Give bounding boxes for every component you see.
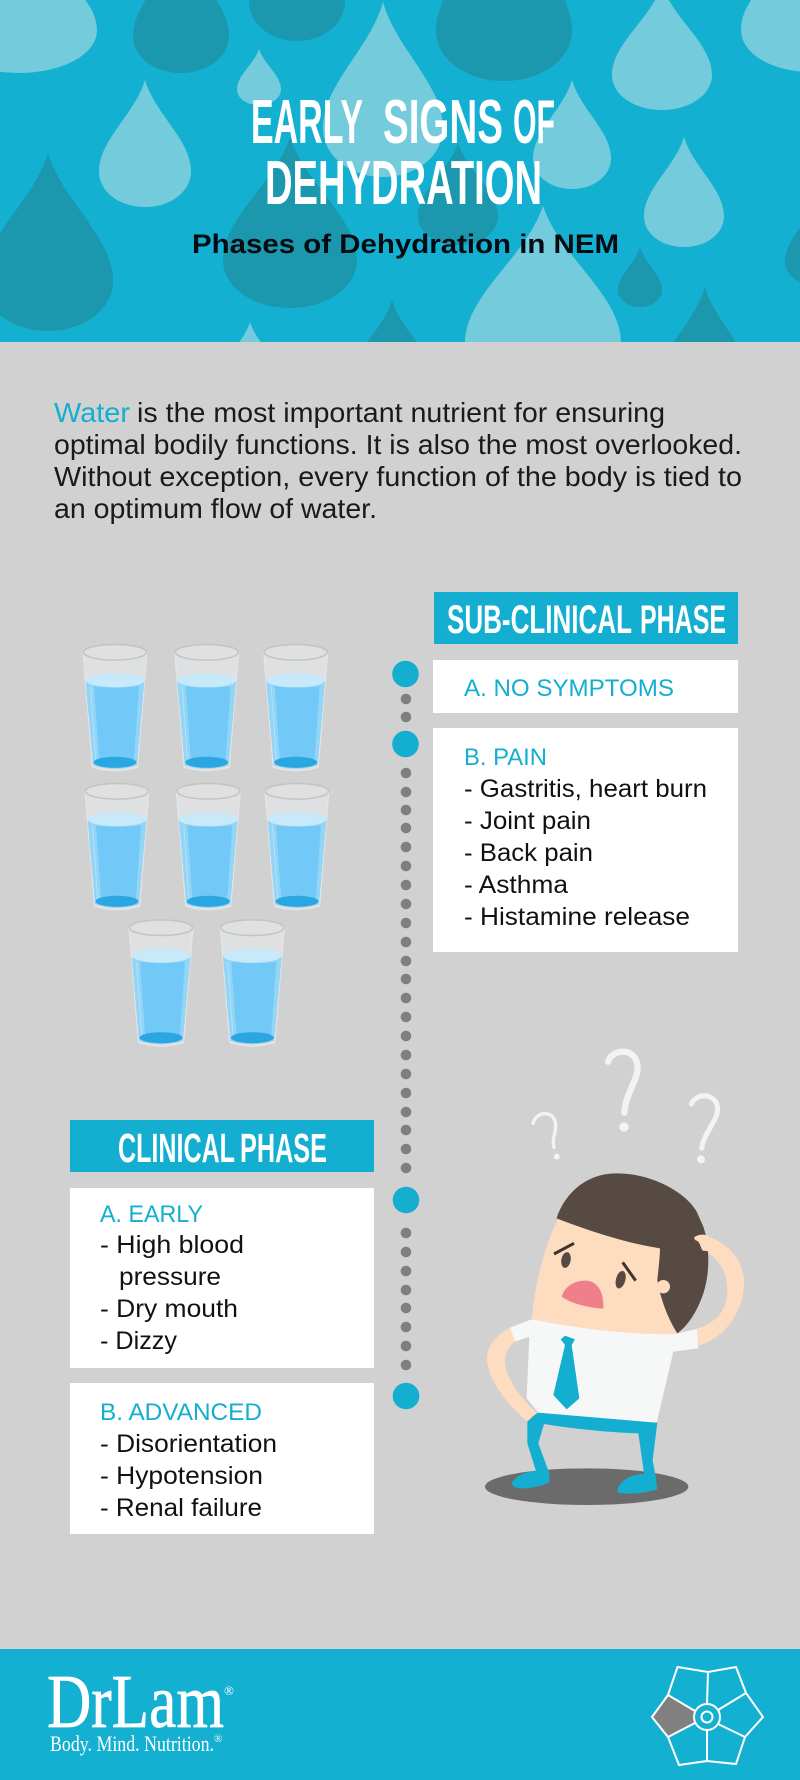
shirt	[510, 1319, 698, 1423]
heading: clinical phase: PHASE	[240, 1125, 327, 1171]
panel: no symptoms: A. NO SYMPTOMS	[464, 675, 674, 702]
panel: advanced	[70, 1383, 374, 1534]
heading: sub-clinical phase: PHASE	[640, 598, 726, 642]
heading: clinical phase: CLINICAL	[118, 1125, 235, 1171]
heading: sub-clinical phase: SUB-CLINICAL	[447, 598, 632, 642]
panel: early: A. EARLY	[100, 1201, 203, 1228]
intro text: is the most important nutrient for ensuring	[137, 397, 665, 428]
panel: pain: - Back pain	[464, 839, 593, 867]
intro text: Water	[54, 397, 130, 428]
timeline	[392, 661, 419, 1409]
illustration: eight glasses of water	[83, 644, 329, 1046]
panel: pain: - Joint pain	[464, 807, 591, 835]
tie	[553, 1336, 579, 1409]
panel: early	[70, 1188, 374, 1368]
shadow	[485, 1468, 688, 1505]
panel: pain: B. PAIN	[464, 744, 547, 771]
logo: Dr Lam: Body. Mind. Nutrition.	[50, 1731, 214, 1756]
panel: pain: - Histamine release	[464, 903, 690, 931]
icon: NEM emblem	[652, 1667, 763, 1765]
trousers and shoes	[512, 1413, 657, 1494]
intro text: Without exception, every function of the body is tied to	[54, 461, 742, 492]
hair	[557, 1173, 708, 1333]
panel: pain: - Asthma	[464, 871, 568, 899]
panel: advanced: B. ADVANCED	[100, 1399, 262, 1426]
title	[251, 88, 555, 218]
panel: advanced: - Hypotension	[100, 1462, 263, 1490]
panel: early: - Dry mouth	[100, 1295, 238, 1323]
panel: no symptoms	[433, 660, 738, 713]
panel: pain: - Gastritis, heart burn	[464, 775, 707, 803]
panel: advanced: - Disorientation	[100, 1430, 277, 1458]
head	[532, 1218, 677, 1334]
panel: early: - High blood	[100, 1231, 244, 1259]
panel: early: pressure	[119, 1263, 221, 1291]
logo: Dr Lam: DrLam	[47, 1660, 224, 1744]
intro text	[54, 397, 742, 524]
arms	[487, 1236, 744, 1422]
panel: early: - Dizzy	[100, 1327, 177, 1355]
heading: clinical phase	[70, 1120, 374, 1172]
logo: Dr Lam: ®	[214, 1733, 222, 1745]
subtitle: Phases of Dehydration in NEM	[192, 229, 619, 259]
panel: advanced: - Renal failure	[100, 1494, 262, 1522]
face features	[554, 1243, 636, 1309]
panel: pain	[433, 728, 738, 952]
ear	[657, 1280, 670, 1293]
water drop pattern	[0, 0, 800, 342]
footer panel	[0, 1649, 800, 1780]
title: DEHYDRATION	[265, 149, 542, 218]
intro text: an optimum flow of water.	[54, 493, 377, 524]
intro text: optimal bodily functions. It is also the most overlooked.	[54, 429, 742, 460]
header panel	[0, 0, 800, 342]
icon: question marks	[533, 1052, 718, 1163]
title: SIGNS	[383, 88, 503, 157]
hand	[694, 1235, 712, 1252]
logo: Dr Lam: ®	[224, 1683, 234, 1698]
illustration: confused man	[485, 1052, 744, 1505]
title: EARLY	[251, 88, 363, 157]
text: OF	[513, 88, 555, 157]
